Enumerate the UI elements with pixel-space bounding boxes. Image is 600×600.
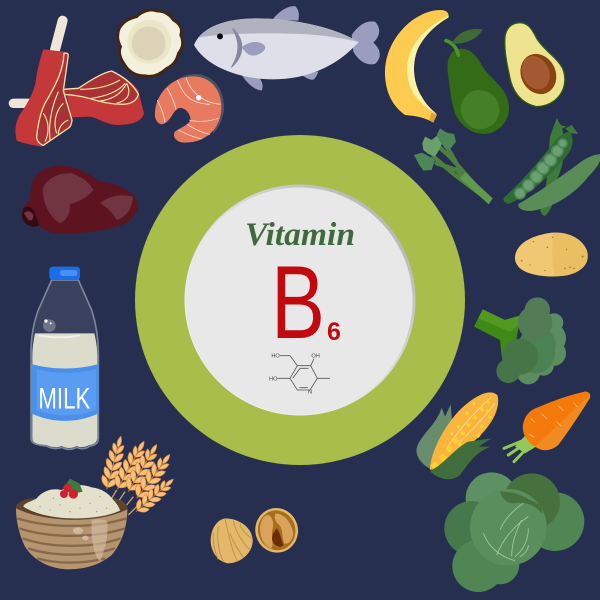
food: salmon steak [155, 74, 224, 143]
food: fish [194, 6, 380, 91]
food: potato [515, 233, 588, 276]
vitamin letter B: B [271, 245, 325, 361]
pyridoxine molecule diagram [269, 354, 330, 396]
food: corn [416, 392, 498, 479]
food: cabbage [444, 472, 584, 592]
pyridoxine molecule diagram: OH [311, 354, 320, 360]
food: meat chops [13, 21, 144, 147]
pyridoxine molecule diagram: N [308, 390, 312, 396]
green plate [135, 135, 465, 465]
whole walnut [211, 518, 253, 563]
food: liver [22, 166, 138, 233]
food: avocado half [505, 23, 565, 107]
pyridoxine molecule diagram: HO [269, 376, 278, 382]
food: celery [414, 128, 493, 204]
food: walnuts [211, 503, 303, 563]
pyridoxine molecule diagram: HO [271, 354, 280, 360]
food: whole avocado [446, 29, 509, 134]
title: Vitamin: Vitamin [245, 217, 355, 253]
food: peas [504, 117, 600, 216]
food: banana [385, 10, 449, 123]
food: scallop [118, 10, 183, 76]
food: milk bottle [31, 267, 99, 449]
vitamin subscript 6: 6 [327, 318, 341, 346]
food: porridge bowl [16, 479, 127, 569]
food: carrot [504, 392, 590, 462]
walnut half [250, 503, 303, 557]
milk label text: MILK [38, 382, 91, 415]
food: wheat ears [99, 434, 178, 517]
food: broccoli [474, 297, 566, 384]
